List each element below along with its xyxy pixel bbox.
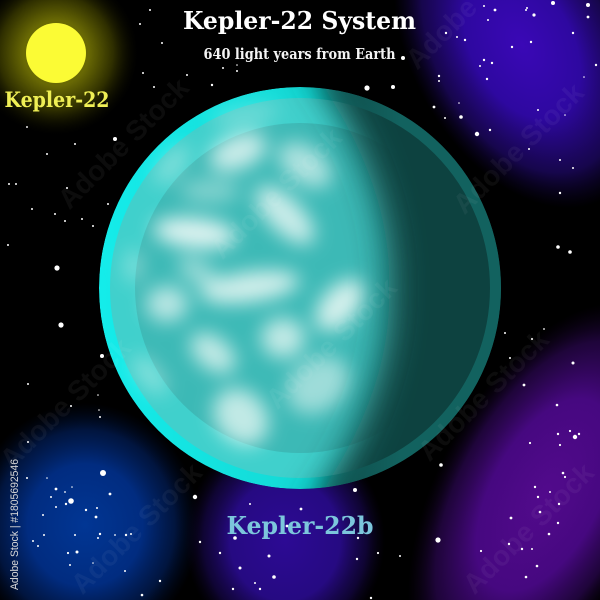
planet night side shadow <box>292 87 501 489</box>
nebula: indigo bottom centre <box>180 430 390 600</box>
watermarks: Adobe Stock <box>412 324 555 467</box>
nebula: violet top right <box>340 0 600 240</box>
planet: Kepler-22b <box>99 87 501 489</box>
watermarks: Adobe Stock <box>447 77 590 220</box>
subtitle: 640 light years from Earth <box>204 46 396 63</box>
watermarks: Adobe Stock <box>260 272 403 415</box>
watermarks: Adobe Stock <box>205 122 348 265</box>
clouds on planet <box>125 101 374 457</box>
title: Kepler-22 System <box>183 6 416 35</box>
nebula: purple bottom right <box>385 300 600 600</box>
sun: Kepler-22 <box>0 0 138 135</box>
label: Kepler-22b planet: Kepler-22b <box>226 511 374 540</box>
nebula: blue bottom left <box>0 395 205 600</box>
watermarks: Adobe Stock <box>65 457 208 600</box>
watermarks: Adobe Stock <box>52 72 195 215</box>
label: Kepler-22 star: Kepler-22 <box>4 87 110 112</box>
watermarks: Adobe Stock <box>457 457 600 600</box>
stock image id: Adobe Stock | #1805692546 <box>9 459 21 590</box>
planet dark side rim <box>320 93 501 484</box>
